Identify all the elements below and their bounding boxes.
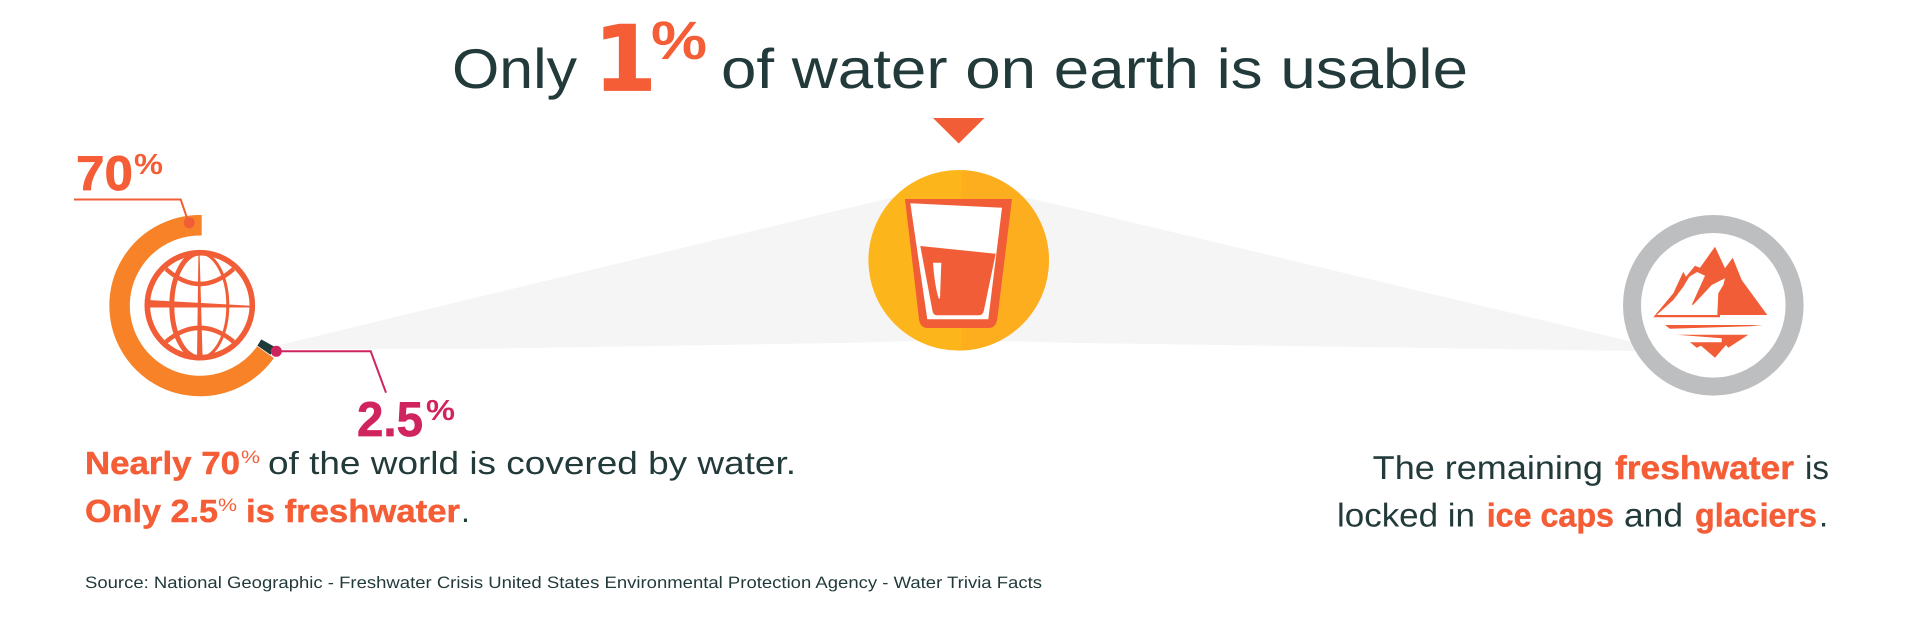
right description text: locked in bbox=[1337, 497, 1475, 534]
70% callout: 70 bbox=[76, 147, 133, 201]
2.5% callout bbox=[271, 346, 455, 447]
title bbox=[452, 8, 1468, 113]
right description text: is bbox=[1805, 449, 1829, 486]
arrow pointing down to glass bbox=[933, 118, 984, 144]
source note: Source: National Geographic - Freshwater Crisis United States Environmental Protection Agency - Water Trivia Facts bbox=[85, 574, 1042, 592]
icon: iceberg in grey ring bbox=[1632, 224, 1795, 387]
right description text: freshwater bbox=[1615, 449, 1794, 486]
title: 1 bbox=[594, 8, 657, 113]
title: Only bbox=[452, 37, 577, 100]
left description text: Nearly 70 bbox=[85, 445, 240, 481]
right description text: The remaining bbox=[1373, 449, 1603, 486]
70% callout bbox=[74, 147, 195, 228]
right description text: . bbox=[1819, 497, 1828, 534]
right description text: ice caps bbox=[1487, 497, 1614, 534]
70% callout: % bbox=[134, 149, 163, 181]
left description text: of the world is covered by water. bbox=[268, 445, 796, 481]
2.5% callout: % bbox=[426, 395, 455, 427]
background cone from globe to glass to iceberg bbox=[276, 182, 1640, 351]
icon: glass of water bbox=[868, 170, 1049, 351]
left description text bbox=[85, 445, 796, 529]
left description text: % bbox=[241, 447, 260, 467]
icon: globe bbox=[147, 253, 252, 358]
right description text: and bbox=[1624, 497, 1683, 534]
right description text: glaciers bbox=[1695, 497, 1817, 534]
title: % bbox=[651, 11, 707, 71]
left description text: % bbox=[218, 495, 237, 515]
donut chart: water coverage bbox=[120, 225, 268, 386]
left description text: . bbox=[461, 493, 470, 529]
left description text: Only 2.5 bbox=[85, 493, 218, 529]
left description text: is freshwater bbox=[246, 493, 460, 529]
title: of water on earth is usable bbox=[721, 37, 1468, 100]
2.5% callout: 2.5 bbox=[357, 393, 423, 447]
right description text bbox=[1337, 449, 1829, 534]
